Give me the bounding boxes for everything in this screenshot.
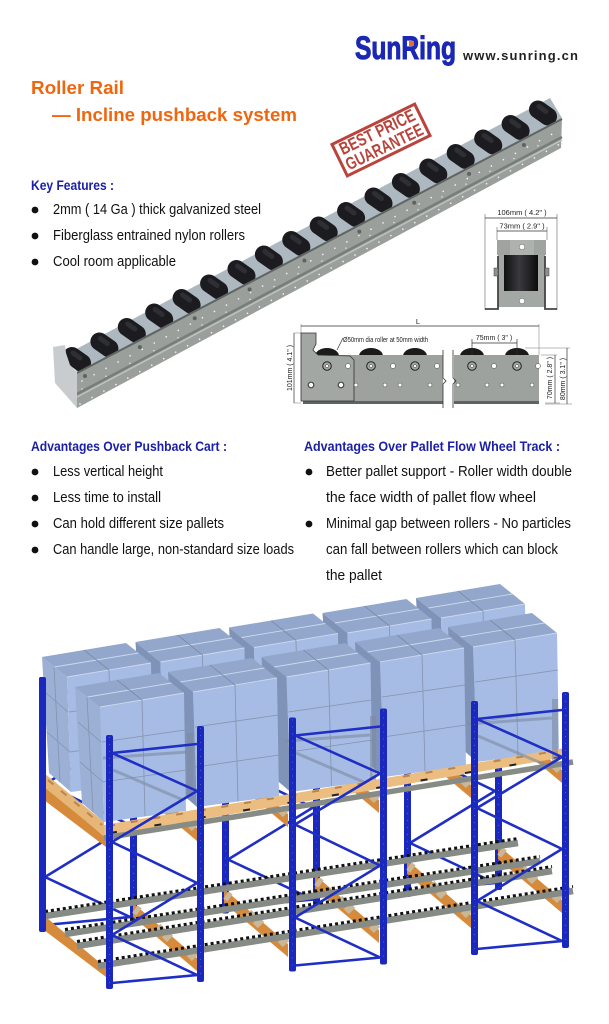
logo: SunRing: SunRing: [355, 30, 456, 66]
diagram: roller cross section: 106mm ( 4.2" ): [497, 208, 547, 217]
panel: advantages over pushback cart: [31, 438, 294, 558]
pallet flow list: Minimal gap between rollers - No particles: [326, 516, 571, 532]
lower roller rails: [45, 838, 573, 966]
stamp: best price guarantee: BEST PRICE: [336, 105, 418, 159]
feature list: 2mm ( 14 Ga ) thick galvanized steel: [53, 202, 261, 218]
pallet loads: front row: [75, 613, 559, 822]
diagram: roller cross section: 73mm ( 2.9" ): [499, 222, 545, 230]
roller rail product image: [53, 98, 562, 408]
title: — Incline pushback system: [52, 105, 297, 125]
pallet flow list: [306, 464, 572, 584]
feature list: Fiberglass entrained nylon rollers: [53, 228, 245, 244]
pallet flow list: the face width of pallet flow wheel: [326, 490, 536, 506]
title: [31, 78, 297, 125]
orange support beams: [40, 715, 562, 977]
diagram: rail side elevation: 75mm ( 3" ): [476, 335, 512, 342]
pallet flow list: the pallet: [326, 568, 382, 584]
heading: key features: Key Features :: [31, 177, 114, 193]
upper front roller rail: [104, 762, 573, 838]
back rack frames: [39, 634, 502, 931]
diagram: rail side elevation: 101mm ( 4.1" ): [287, 345, 294, 391]
panel: key features: [31, 177, 261, 270]
panel: advantages over pallet flow wheel track: [304, 438, 572, 584]
pallet flow list: can fall between rollers which can block: [326, 542, 559, 558]
diagram: roller cross section: [485, 208, 557, 310]
feature list: Cool room applicable: [53, 254, 176, 270]
pushback cart list: Can handle large, non-standard size loads: [53, 542, 294, 558]
diagram: rail side elevation: 70mm ( 2.8" ): [547, 357, 554, 399]
diagram: rail side elevation: L: [416, 317, 420, 326]
stamp: best price guarantee: [331, 103, 430, 176]
heading: pushback cart: Advantages Over Pushback Cart :: [31, 438, 227, 454]
heading: pallet flow wheel track: Advantages Over Pallet Flow Wheel Track :: [304, 438, 560, 454]
front rack frames: [106, 692, 569, 989]
diagram: rail side elevation: [287, 317, 572, 408]
upright shadows on boxes: [103, 699, 555, 800]
diagram: rail side elevation: 80mm ( 3.1" ): [560, 358, 567, 400]
pallet flow list: Better pallet support - Roller width double: [326, 464, 572, 480]
left rear upright: [39, 677, 46, 932]
feature list: [32, 202, 261, 270]
pallet loads: back row: [42, 584, 527, 792]
title: Roller Rail: [31, 78, 124, 98]
stamp: best price guarantee: GUARANTEE: [342, 119, 426, 174]
diagram: rail side elevation: Ø50mm dia roller at 50mm width: [343, 337, 428, 344]
pushback cart list: [32, 464, 294, 558]
illustration: pushback racking with pallets: [39, 584, 573, 989]
pushback cart list: Can hold different size pallets: [53, 516, 224, 532]
pushback cart list: Less vertical height: [53, 464, 163, 480]
wooden pallets: [44, 748, 565, 836]
website url: www.sunring.cn: [462, 48, 578, 63]
pushback cart list: Less time to install: [53, 490, 161, 506]
